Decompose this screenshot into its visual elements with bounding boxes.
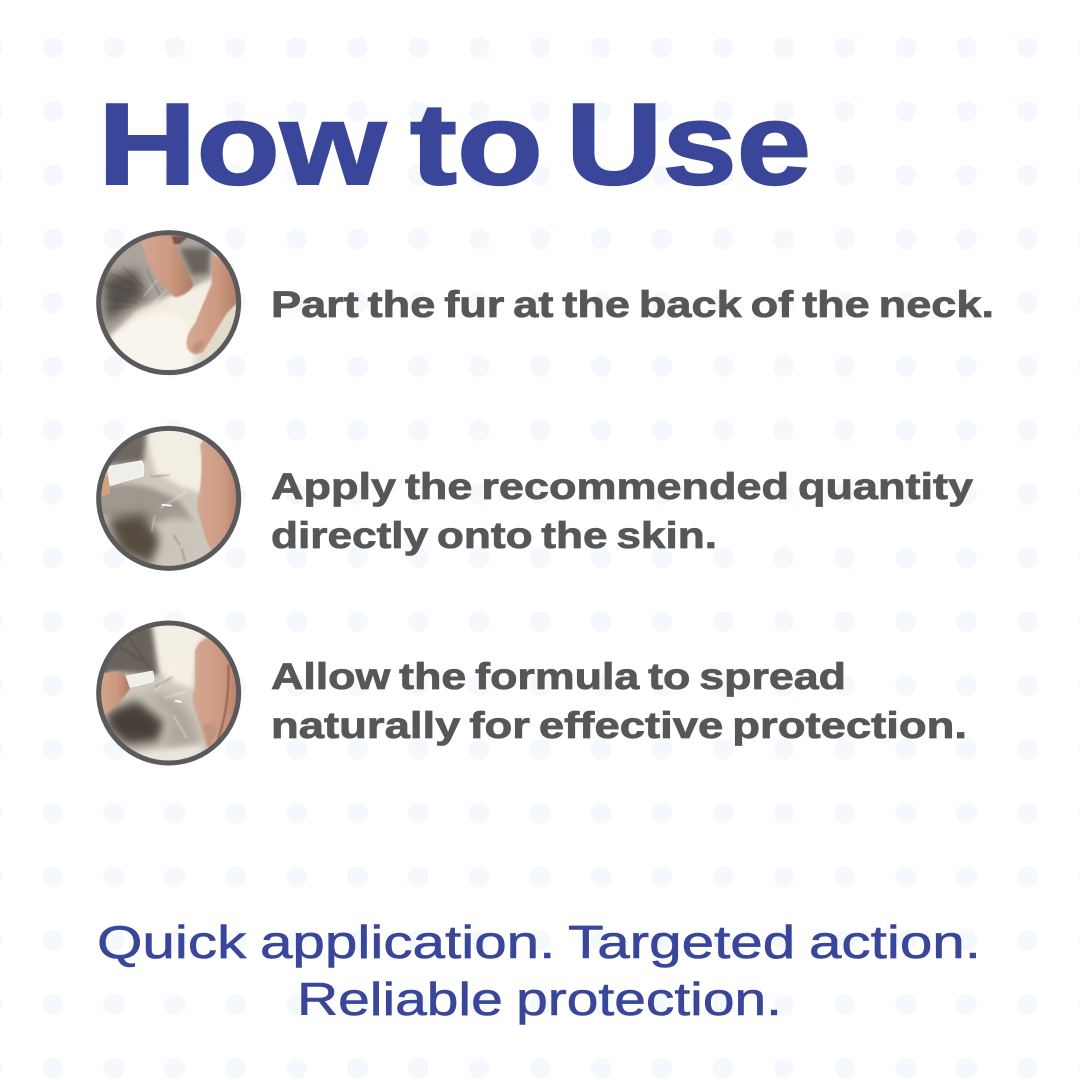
instruction text 3: [271, 655, 967, 746]
instruction text 3: naturally for effective protection.: [271, 704, 967, 746]
instruction text 2: Apply the recommended quantity: [271, 465, 973, 507]
step 1: [93, 227, 994, 380]
closing tagline: Reliable protection.: [297, 973, 782, 1025]
instruction text 2: directly onto the skin.: [271, 514, 717, 556]
instruction text 1: Part the fur at the back of the neck.: [271, 283, 994, 325]
title: Use: [566, 79, 811, 209]
photo: formula spreading on skin: [96, 620, 242, 766]
step 3: [93, 618, 967, 772]
closing tagline: [97, 916, 981, 1025]
instruction text 2: [271, 465, 973, 556]
title: to: [410, 79, 543, 209]
title: [98, 79, 811, 209]
title: How: [98, 79, 387, 209]
photo: applying with applicator tip: [93, 422, 247, 575]
instruction text 3: Allow the formula to spread: [271, 655, 846, 697]
photo: parting cat fur: [93, 227, 247, 380]
step 2: [93, 422, 973, 575]
closing tagline: Quick application. Targeted action.: [97, 916, 981, 968]
